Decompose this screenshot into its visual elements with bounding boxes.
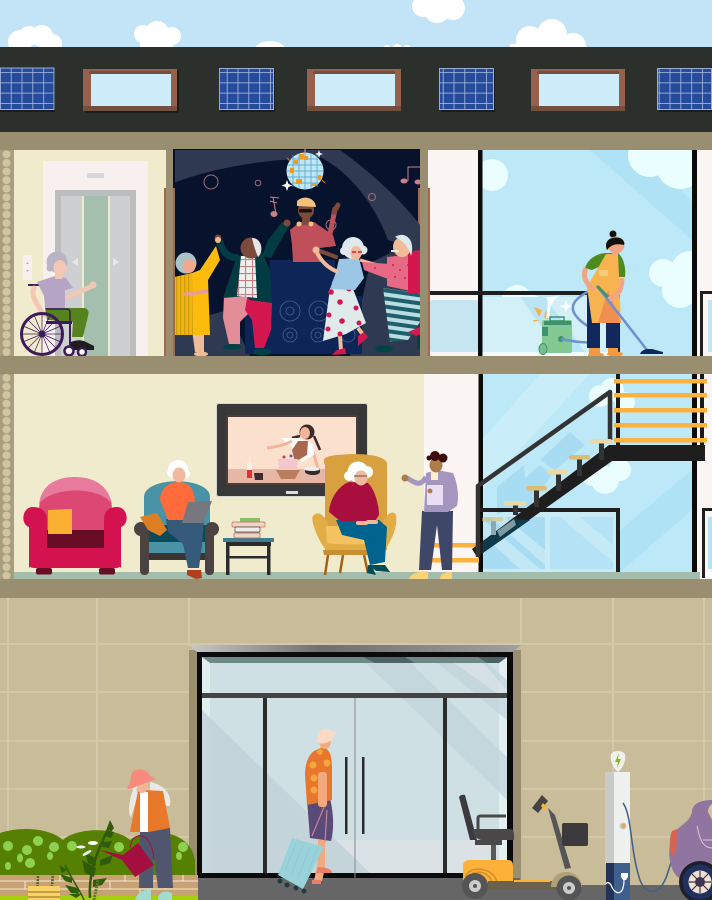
sky with clouds xyxy=(0,0,712,47)
armchair yellow with seated woman xyxy=(312,454,396,575)
dancing man xyxy=(214,220,290,356)
woman in yellow dress xyxy=(175,237,221,356)
roof window 3 xyxy=(531,69,625,111)
seated woman xyxy=(329,462,390,575)
solar panel 1 xyxy=(0,68,55,112)
ground floor wall xyxy=(0,598,712,900)
wall screen with baking show xyxy=(216,403,368,497)
roof band xyxy=(0,47,712,132)
dancing woman in floral skirt xyxy=(312,237,378,355)
baker xyxy=(247,424,320,480)
panel: elevator lobby xyxy=(14,150,166,356)
armchair teal with woman on laptop xyxy=(134,460,219,579)
staircase xyxy=(472,392,705,557)
disco ball xyxy=(282,149,326,191)
panel: disco room xyxy=(173,149,424,356)
caregiver with clipboard xyxy=(402,451,458,579)
orange rungs xyxy=(432,379,707,562)
EV charging station xyxy=(605,751,630,900)
panel: glass hall and staircase xyxy=(432,374,712,580)
solar panel 2 xyxy=(220,68,275,112)
upper floor slab xyxy=(0,132,712,150)
decorative rings and notes xyxy=(204,167,424,230)
gardener with watering can xyxy=(76,769,173,900)
DJ xyxy=(290,198,338,262)
purple electric car xyxy=(669,800,712,900)
solar panel 4 xyxy=(658,68,712,112)
solar panel 3 xyxy=(440,68,495,112)
elevator xyxy=(23,161,148,356)
roof window 1 xyxy=(83,69,179,113)
panel: glass hall with cleaner xyxy=(428,133,712,358)
armchair red xyxy=(23,477,127,574)
traveller with suitcase xyxy=(278,729,338,894)
planter with hedge xyxy=(0,829,198,900)
entrance door xyxy=(189,645,521,880)
mid slab xyxy=(0,356,712,374)
roof window 2 xyxy=(307,69,401,111)
pavement xyxy=(198,878,712,900)
DJ booth xyxy=(245,260,362,354)
side table with books xyxy=(223,518,274,575)
mobility scooter xyxy=(459,795,588,900)
charging cable xyxy=(623,803,682,891)
wheelchair woman xyxy=(22,252,96,356)
vacuum machine xyxy=(533,295,572,354)
woman on laptop xyxy=(140,460,212,579)
man in pink sweater xyxy=(362,235,420,352)
crate and plant xyxy=(28,820,114,900)
floor strip xyxy=(14,572,700,579)
upper floor xyxy=(0,133,712,358)
cleaner xyxy=(561,230,663,358)
lounge floor xyxy=(0,374,712,598)
